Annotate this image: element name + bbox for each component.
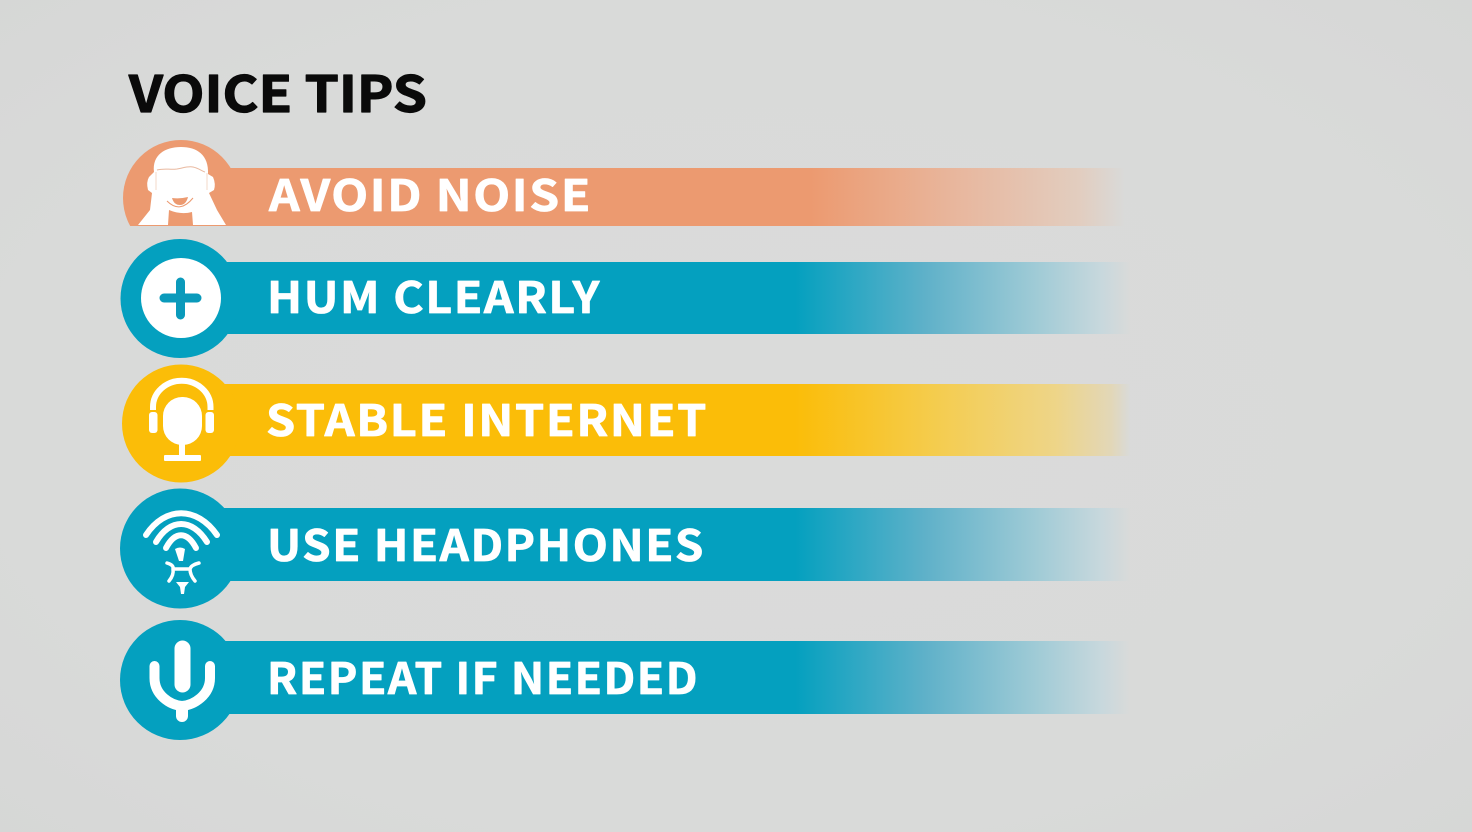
icon: plus in circle: [120, 239, 240, 358]
icon: face covering ears: [123, 140, 230, 226]
bar: avoid noise: [200, 168, 1125, 226]
label: use headphones: USE HEADPHONES: [267, 512, 705, 574]
bar: use headphones: [200, 508, 1130, 581]
label: repeat if needed: REPEAT IF NEEDED: [267, 645, 699, 707]
label: hum clearly: HUM CLEARLY: [267, 264, 601, 326]
tip row: stable internet: [122, 364, 1130, 482]
icon: microphone: [120, 620, 240, 740]
title: VOICE TIPS: [128, 55, 427, 127]
tip row: avoid noise: [123, 140, 1112, 226]
icon: headset microphone: [122, 364, 240, 482]
bar: stable internet: [200, 384, 1130, 456]
icon: wifi signal: [120, 488, 240, 608]
bar: repeat if needed: [200, 641, 1130, 714]
tip row: use headphones: [120, 488, 1130, 608]
label: stable internet: STABLE INTERNET: [266, 387, 708, 449]
bar: hum clearly: [200, 262, 1130, 334]
tip row: hum clearly: [120, 239, 1130, 358]
label: avoid noise: AVOID NOISE: [268, 162, 592, 224]
tip row: repeat if needed: [120, 620, 1130, 740]
